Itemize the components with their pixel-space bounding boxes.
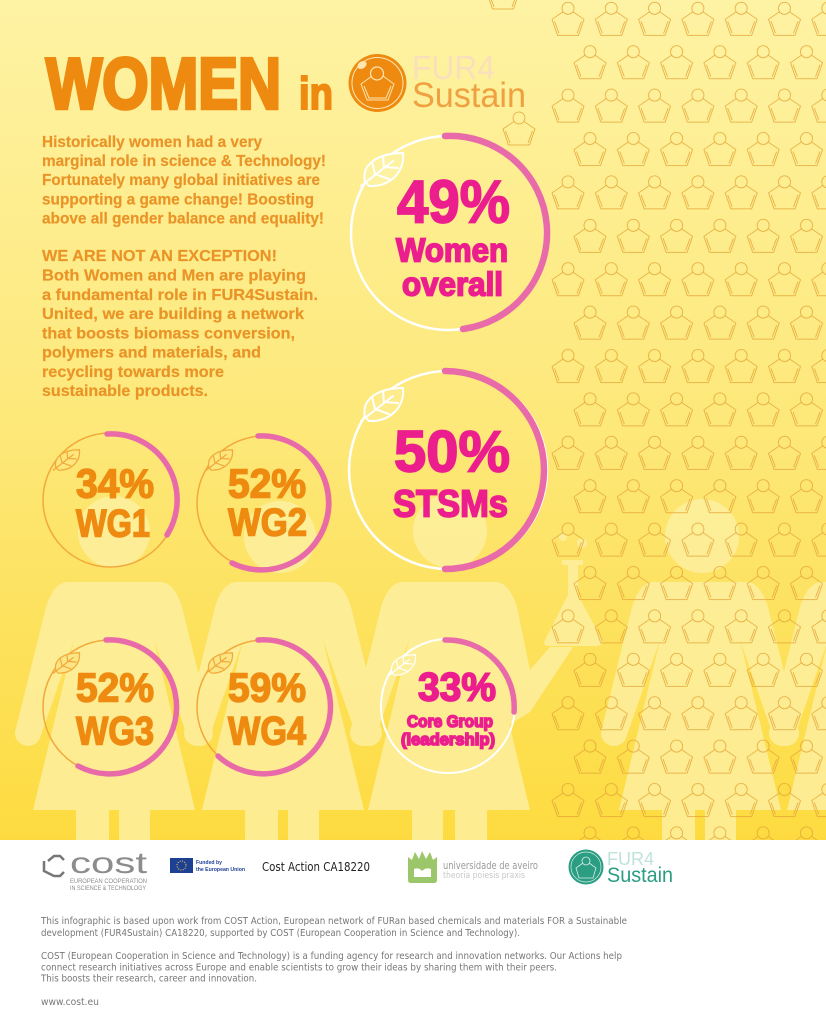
- stat: 34% WG1: [43, 433, 177, 567]
- intro paragraph: [42, 134, 326, 228]
- stat: 33% core group: 33%: [418, 666, 496, 710]
- stat: 34% WG1: 34%: [76, 460, 154, 506]
- stat: 50% STSMs: [349, 371, 547, 569]
- stat: 59% WG4: 59%: [228, 664, 306, 710]
- intro paragraph: Historically women had a very: [42, 134, 262, 151]
- stat: 49% women overall: overall: [402, 266, 503, 302]
- stat: 50% STSMs: 50%: [394, 420, 510, 484]
- logo: universidade de aveiro: [408, 851, 538, 883]
- stat: 49% women overall: Women: [396, 232, 508, 268]
- intro paragraph: supporting a game change! Boosting: [42, 192, 314, 208]
- intro paragraph: above all gender balance and equality!: [42, 210, 324, 228]
- second paragraph: recycling towards more: [42, 364, 224, 381]
- second paragraph: WE ARE NOT AN EXCEPTION!: [42, 248, 277, 265]
- stat: 52% WG3: 52%: [76, 664, 154, 710]
- logo: FUR4Sustain orange: FUR4: [412, 49, 495, 86]
- stat: 49% women overall: [351, 136, 547, 330]
- action code: Cost Action CA18220: [262, 860, 370, 874]
- stat: 59% WG4: [197, 640, 331, 774]
- silhouettes of women: [15, 494, 826, 840]
- disclaimer text: This infographic is based upon work from COST Action, European network of FURan based chemicals and materials FOR a Sustainable: [40, 916, 627, 927]
- intro paragraph: marginal role in science & Technology!: [42, 153, 326, 170]
- stat: 33% core group: (leadership): [401, 730, 495, 749]
- logo: EU flag: [170, 858, 246, 873]
- logo: FUR4Sustain green: Sustain: [607, 864, 673, 887]
- stat: 52% WG3: WG3: [76, 710, 154, 754]
- pattern of person icons: [487, 0, 826, 840]
- stat: 33% core group: [381, 639, 515, 773]
- logo: EU flag: Funded by: [196, 860, 223, 866]
- second paragraph: [42, 248, 318, 400]
- logo: COST: cost: [70, 847, 148, 880]
- title: in: [299, 68, 333, 119]
- logo: EU flag: the European Union: [196, 867, 246, 873]
- disclaimer text: [40, 916, 627, 939]
- stat: 34% WG1: WG1: [76, 502, 150, 546]
- COST description: connect research initiatives across Europe and enable scientists to grow their ideas by sharing them with their peers.: [41, 962, 557, 974]
- stat: 33% core group: Core Group: [407, 712, 493, 731]
- logo: universidade de aveiro: theoria poiesis praxis: [443, 871, 525, 881]
- second paragraph: a fundamental role in FUR4Sustain.: [42, 287, 318, 304]
- stat: 52% WG2: WG2: [228, 502, 307, 544]
- website: www.cost.eu: [41, 997, 99, 1008]
- stat: 52% WG2: 52%: [228, 460, 306, 506]
- intro paragraph: Fortunately many global initiatives are: [42, 172, 320, 189]
- logo: FUR4Sustain orange: Sustain: [412, 76, 526, 115]
- second paragraph: polymers and materials, and: [42, 344, 261, 362]
- stat: 50% STSMs: STSMs: [393, 484, 508, 526]
- second paragraph: that boosts biomass conversion,: [42, 326, 295, 342]
- footer panel: [0, 840, 826, 1024]
- second paragraph: sustainable products.: [42, 383, 208, 400]
- COST description: This boosts their research, career and innovation.: [40, 974, 257, 984]
- stat: 49% women overall: 49%: [397, 168, 510, 236]
- second paragraph: Both Women and Men are playing: [42, 268, 306, 284]
- logo: FUR4Sustain green: [568, 849, 673, 887]
- logo: FUR4Sustain orange: [348, 49, 526, 115]
- disclaimer text: development (FUR4Sustain) CA18220, supported by COST (European Cooperation in Science and Technology).: [41, 928, 520, 939]
- title: WOMEN: [46, 44, 281, 124]
- logo: COST: [44, 847, 148, 892]
- stat: 52% WG2: [197, 436, 331, 570]
- stat: 59% WG4: WG4: [228, 710, 307, 754]
- logo: universidade de aveiro: universidade de aveiro: [443, 859, 538, 872]
- COST description: COST (European Cooperation in Science and Technology) is a funding agency for research and innovation networks. Our Actions help: [41, 951, 622, 962]
- second paragraph: United, we are building a network: [42, 306, 304, 323]
- stat: 52% WG3: [43, 640, 177, 774]
- logo: COST: EUROPEAN COOPERATION: [70, 878, 147, 885]
- logo: COST: IN SCIENCE & TECHNOLOGY: [70, 885, 147, 892]
- COST description: [40, 951, 622, 984]
- logo: FUR4Sustain green: FUR4: [607, 849, 654, 869]
